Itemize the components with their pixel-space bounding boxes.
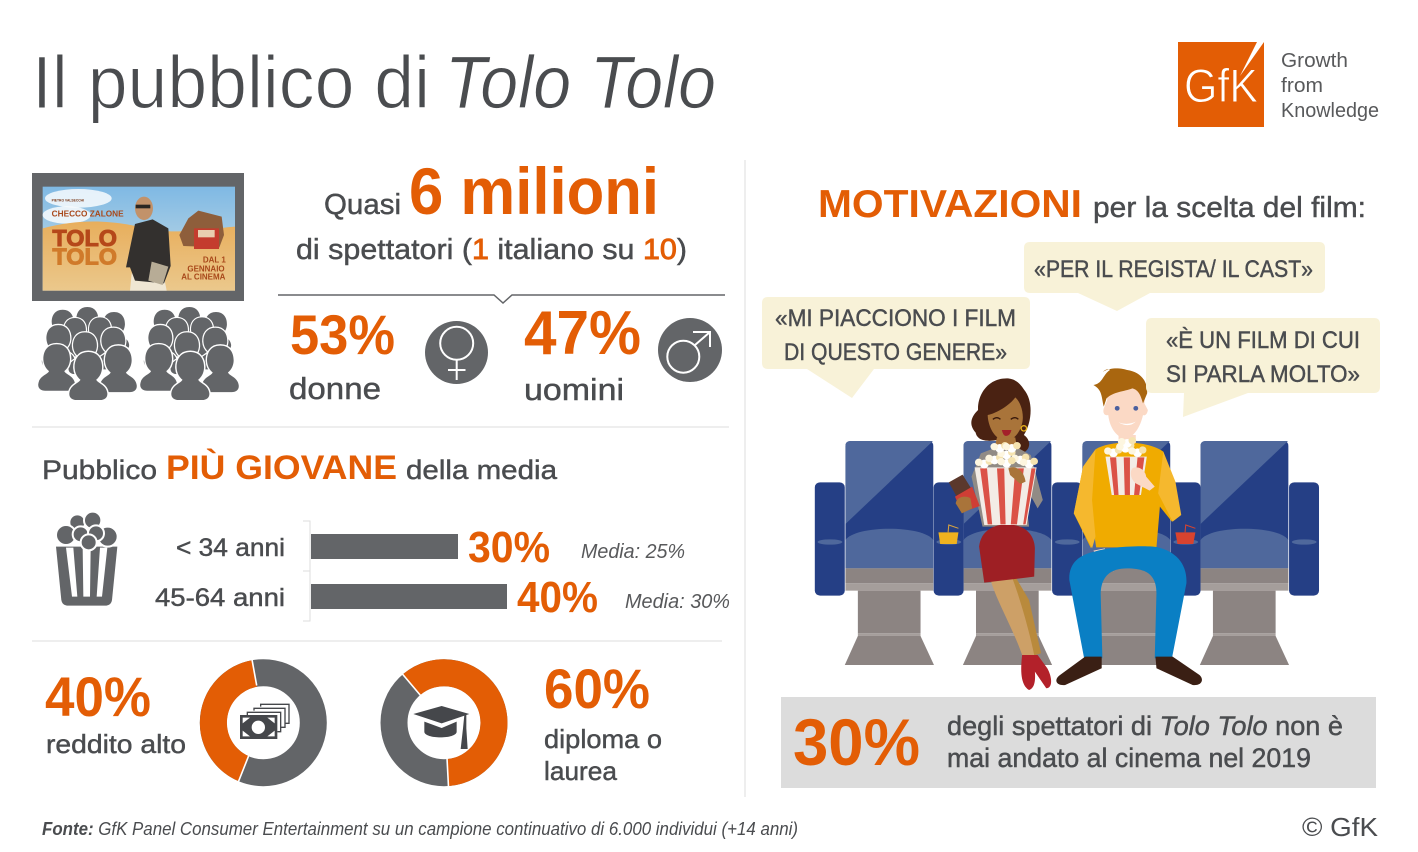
panel: movie poster on screen: AL CINEMA (181, 273, 226, 282)
woman (949, 378, 1051, 690)
panel: movie poster on screen: CHECCO ZALONE (52, 208, 124, 218)
GfK logo (1178, 42, 1264, 127)
income stat: 40% (45, 665, 151, 728)
heading: motivations: MOTIVAZIONI (818, 183, 1082, 226)
GfK logo: GfK (1184, 59, 1258, 112)
logo tagline: Growth (1281, 50, 1348, 72)
panel: movie poster on screen: TOLO (52, 244, 117, 270)
icon: popcorn (56, 512, 118, 606)
bar label: under 34: < 34 anni (176, 534, 285, 562)
illustration: couple in cinema seats (815, 368, 1319, 690)
logo tagline: Knowledge (1281, 100, 1379, 122)
bar label: 45-64: 45-64 anni (155, 584, 285, 612)
icon: male symbol (658, 318, 722, 382)
education stat: 60% (544, 657, 650, 720)
title (32, 41, 716, 124)
average: under 34: Media: 25% (581, 541, 685, 563)
speech bubble: talked about (1146, 318, 1380, 417)
icon: audience silhouettes (38, 307, 239, 400)
value: under 34: 30% (468, 523, 550, 572)
bar chart: age groups (155, 521, 730, 622)
bar: under 34 (311, 534, 458, 559)
logo tagline (1281, 50, 1379, 122)
bar: 45-64 (311, 584, 507, 609)
women stat: donne (289, 371, 381, 406)
speech bubble: film genre: DI QUESTO GENERE» (784, 339, 1007, 366)
callout: 30% never went to cinema: degli spettatori di Tolo Tolo non è (947, 711, 1343, 741)
women stat (289, 303, 395, 406)
red drink (1175, 525, 1195, 544)
seats (815, 441, 1319, 665)
men stat: uomini (524, 372, 624, 407)
audience size headline: 6 milioni (409, 154, 659, 228)
panel: movie poster on screen: PIETRO VALSECCHI (52, 199, 84, 203)
copyright: © GfK (1302, 812, 1379, 842)
icon: graduation cap (413, 706, 469, 749)
speech bubble: director and cast (1024, 242, 1325, 311)
heading: younger audience (42, 449, 558, 487)
panel: movie poster on screen (32, 173, 244, 301)
audience size headline (296, 154, 687, 266)
heading: younger audience: Pubblico (42, 455, 157, 485)
yellow drink (938, 525, 958, 544)
donut chart: education (394, 673, 494, 787)
heading: younger audience: della media (406, 455, 558, 485)
title: Tolo Tolo (445, 41, 716, 124)
speech bubble: film genre: «MI PIACCIONO I FILM (775, 305, 1016, 332)
education stat: laurea (544, 756, 618, 786)
audience size headline: di spettatori ( 1 italiano su 10) (296, 234, 687, 266)
icon: female symbol (425, 321, 488, 384)
income stat: reddito alto (46, 729, 186, 759)
speech bubble: talked about: SI PARLA MOLTO» (1166, 361, 1360, 388)
logo tagline: from (1281, 75, 1323, 97)
panel: movie poster on screen: GENNAIO (187, 265, 225, 274)
audience size headline: Quasi (324, 189, 401, 221)
source note: Fonte: GfK Panel Consumer Entertainment su un campione continuativo di 6.000 individui (+14 anni) (42, 819, 798, 839)
donut chart: high income (213, 658, 313, 784)
women stat: 53% (290, 303, 395, 366)
title: Il pubblico di (32, 41, 430, 124)
panel: movie poster on screen: DAL 1 (203, 256, 226, 265)
heading: younger audience: PIÙ GIOVANE (166, 449, 397, 487)
men stat: 47% (524, 299, 641, 368)
men stat (524, 299, 641, 407)
income stat (45, 665, 186, 759)
speech bubble: film genre (762, 297, 1030, 398)
education stat (544, 657, 662, 786)
callout: 30% never went to cinema: mai andato al cinema nel 2019 (947, 743, 1311, 773)
heading: motivations (818, 183, 1366, 226)
education stat: diploma o (544, 724, 662, 754)
average: 45-64: Media: 30% (625, 591, 730, 613)
man (1056, 368, 1202, 685)
callout: 30% never went to cinema (781, 697, 1376, 788)
callout: 30% never went to cinema: 30% (793, 705, 920, 779)
speech bubble: talked about: «È UN FILM DI CUI (1166, 327, 1360, 354)
value: 45-64: 40% (517, 573, 598, 622)
speech bubble: director and cast: «PER IL REGISTA/ IL CAST» (1034, 256, 1313, 283)
icon: banknotes (240, 704, 289, 739)
panel: movie poster on screen: TOLO (52, 225, 117, 251)
heading: motivations: per la scelta del film: (1093, 192, 1366, 224)
